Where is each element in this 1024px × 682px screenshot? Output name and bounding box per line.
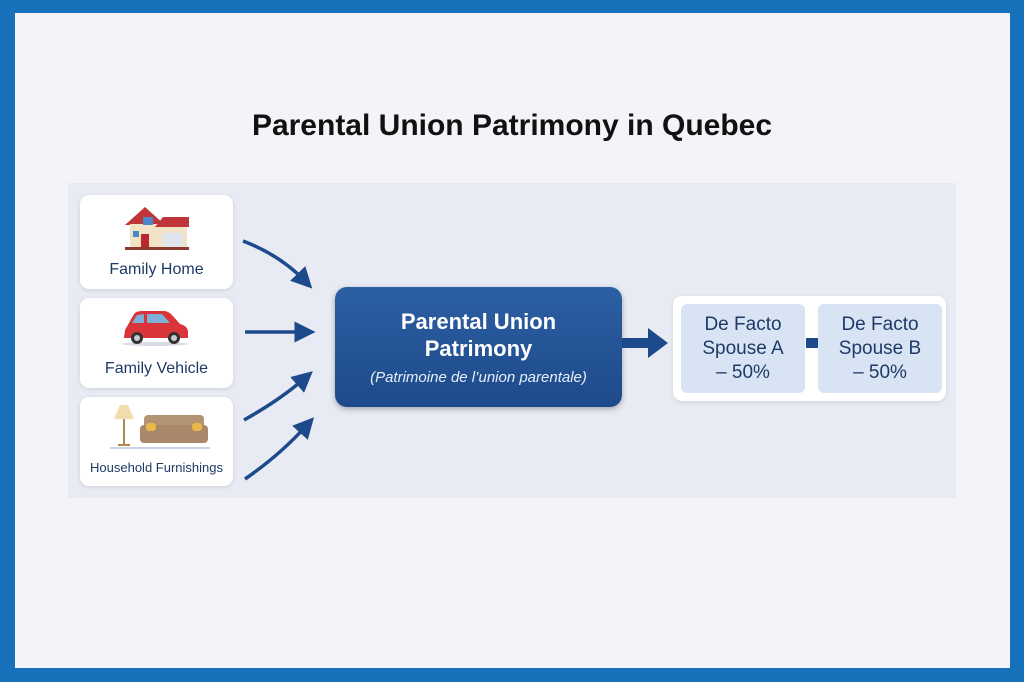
center box: parental union patrimony: (Patrimoine de l’union parentale) (370, 369, 587, 386)
connector (806, 338, 818, 348)
card: family vehicle (80, 298, 233, 388)
spouse A (681, 304, 805, 393)
spouse A: – 50% (716, 362, 770, 383)
label: Family Home (109, 261, 204, 278)
card: family home (80, 195, 233, 289)
title: Parental Union Patrimony in Quebec (252, 109, 772, 142)
center box: parental union patrimony: Patrimony (425, 336, 532, 361)
icon: house (125, 207, 189, 250)
spouse A: De Facto (704, 314, 782, 335)
spouse B: De Facto (841, 314, 919, 335)
card: household furnishings (80, 397, 233, 486)
center box: parental union patrimony (335, 287, 622, 407)
spouse B: Spouse B (839, 338, 921, 359)
label: Household Furnishings (90, 460, 223, 475)
center box: parental union patrimony: Parental Union (401, 309, 556, 334)
panel: spouses (673, 296, 946, 401)
arrow: center to spouses (622, 328, 668, 358)
label: Family Vehicle (105, 360, 208, 377)
icon: sofa and lamp (110, 405, 210, 449)
icon: car (122, 311, 188, 346)
panel: diagram background (68, 183, 956, 498)
spouse B: – 50% (853, 362, 907, 383)
spouse A: Spouse A (702, 338, 784, 359)
spouse B (818, 304, 942, 393)
